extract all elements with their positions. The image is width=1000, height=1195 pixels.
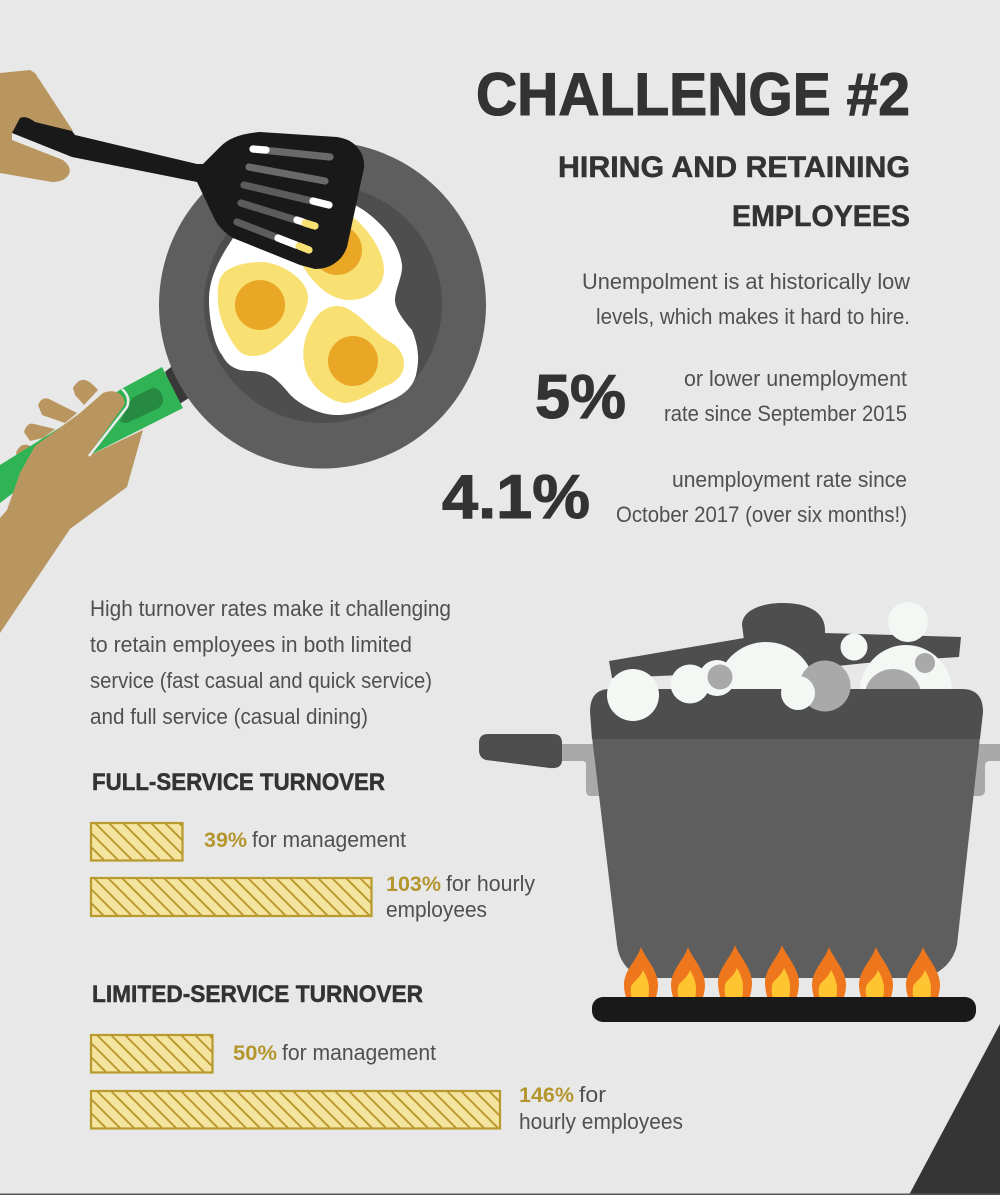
pot black handle bbox=[479, 734, 562, 768]
pan rim bbox=[159, 142, 486, 468]
pot side handles bbox=[560, 744, 1000, 796]
bar chart: limited-service turnover bbox=[91, 1035, 683, 1134]
bar: 103% for hourly employees bbox=[91, 871, 535, 922]
stat: 4.1%: October 2017 (over six months!) bbox=[616, 502, 907, 527]
pan handle connector bbox=[165, 366, 192, 405]
text: unemployment intro bbox=[582, 269, 910, 329]
text: turnover intro: High turnover rates make it challenging bbox=[90, 596, 451, 621]
icon: hand holding spatula bbox=[0, 70, 73, 182]
stat: 4.1%: 4.1% bbox=[442, 463, 590, 532]
icon: frying pan with eggs bbox=[159, 142, 486, 468]
egg whites bbox=[209, 200, 418, 415]
egg 1 bbox=[218, 262, 308, 356]
text: turnover intro: service (fast casual and quick service) bbox=[90, 668, 432, 693]
pot body bbox=[592, 737, 980, 978]
heading: limited-service turnover: LIMITED-SERVICE TURNOVER bbox=[92, 981, 423, 1008]
green handle bbox=[0, 367, 183, 503]
bar: 146% for hourly employees: hourly employees bbox=[519, 1109, 683, 1134]
bar: 146% for hourly employees: 146% bbox=[519, 1084, 574, 1107]
icon: spatula bbox=[12, 117, 364, 269]
steam domes bbox=[717, 642, 952, 739]
stat: 5%: or lower unemployment bbox=[684, 366, 907, 391]
bubbles bbox=[607, 602, 935, 721]
burner bbox=[592, 997, 976, 1022]
egg 3 bbox=[303, 306, 404, 403]
subtitle bbox=[558, 151, 910, 233]
stat: 4.1% bbox=[442, 463, 907, 532]
bar: 39% for management: 39% bbox=[204, 829, 247, 852]
pot lid bbox=[609, 603, 961, 678]
subtitle: EMPLOYEES bbox=[732, 200, 910, 233]
pan interior bbox=[204, 185, 442, 423]
text: turnover intro bbox=[90, 596, 451, 729]
bar: 50% for management bbox=[91, 1035, 436, 1072]
icon: hand holding green pan handle bbox=[0, 367, 183, 633]
heading: full-service turnover: FULL-SERVICE TURNOVER bbox=[92, 769, 385, 796]
flames bbox=[624, 945, 940, 1000]
pot rim band bbox=[590, 689, 983, 739]
stat: 5% bbox=[535, 363, 907, 432]
stat: 5%: 5% bbox=[535, 363, 626, 432]
bar: 50% for management: for management bbox=[282, 1040, 436, 1065]
decorative corner triangle bbox=[909, 1024, 1000, 1195]
bar: 146% for hourly employees: for bbox=[579, 1082, 606, 1107]
icon: boiling pot on burner bbox=[479, 602, 1000, 1022]
spatula slots bbox=[237, 149, 330, 250]
bar: 146% for hourly employees bbox=[91, 1082, 683, 1134]
title: CHALLENGE #2 bbox=[476, 61, 910, 128]
bar: 103% for hourly employees: for hourly bbox=[446, 871, 535, 896]
bar: 39% for management bbox=[91, 823, 406, 860]
bar: 103% for hourly employees: employees bbox=[386, 897, 487, 922]
palm bbox=[0, 391, 143, 633]
bar chart: full-service turnover bbox=[91, 823, 535, 922]
text: turnover intro: and full service (casual dining) bbox=[90, 704, 368, 729]
bar: 103% for hourly employees: 103% bbox=[386, 873, 441, 896]
fingers bbox=[73, 380, 98, 405]
text: unemployment intro: levels, which makes it hard to hire. bbox=[596, 304, 910, 329]
bar: 39% for management: for management bbox=[252, 827, 406, 852]
subtitle: HIRING AND RETAINING bbox=[558, 151, 910, 184]
egg 2 bbox=[302, 215, 384, 300]
stat: 4.1%: unemployment rate since bbox=[672, 467, 907, 492]
text: turnover intro: to retain employees in both limited bbox=[90, 632, 412, 657]
text: unemployment intro: Unempolment is at historically low bbox=[582, 269, 910, 294]
stat: 5%: rate since September 2015 bbox=[664, 401, 907, 426]
bar: 50% for management: 50% bbox=[233, 1042, 277, 1065]
